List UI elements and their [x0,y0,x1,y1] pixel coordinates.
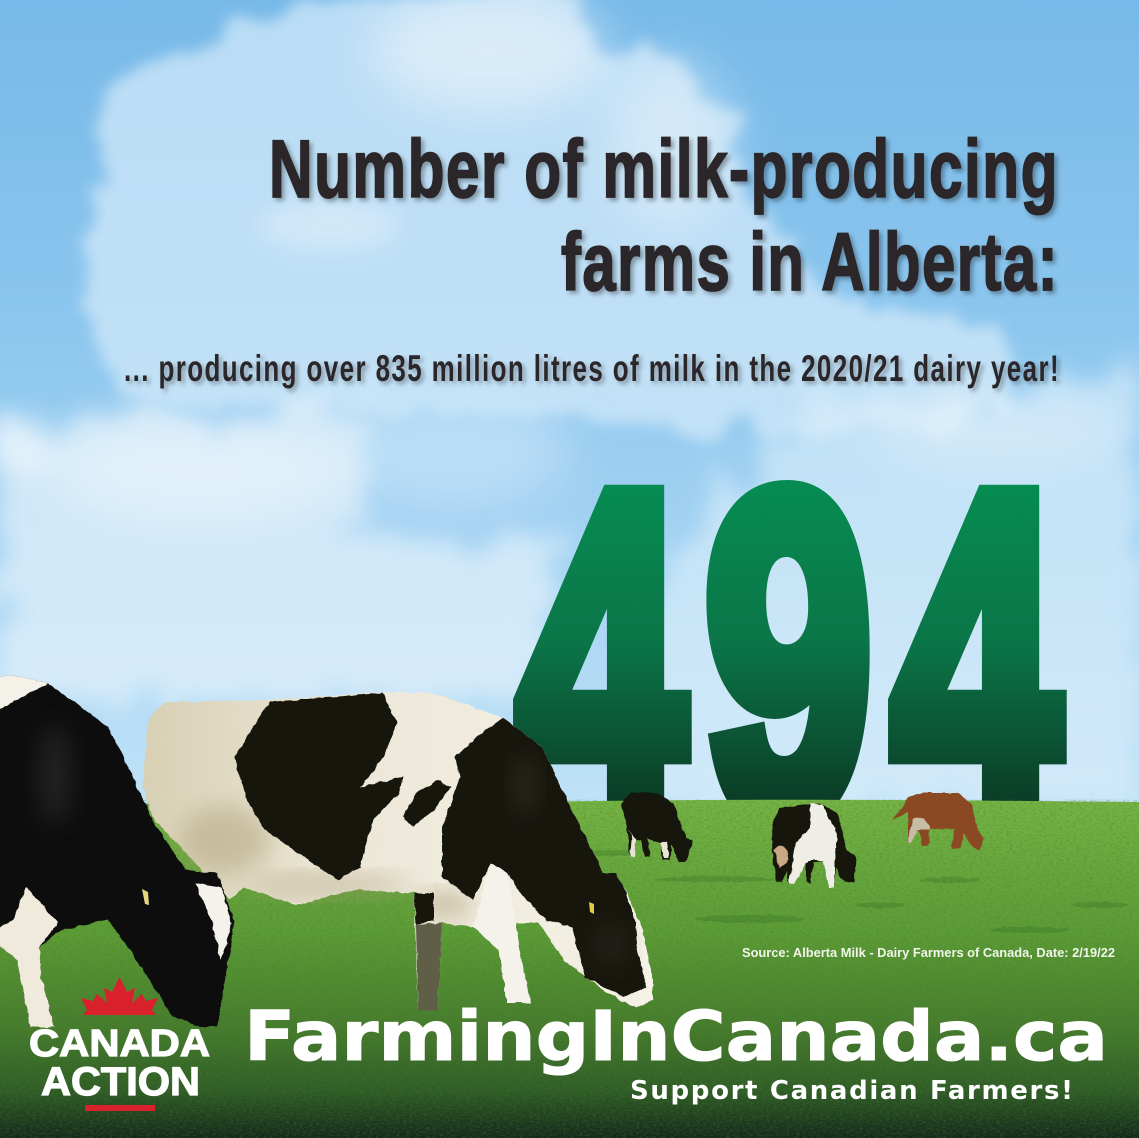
source line: Source: Alberta Milk - Dairy Farmers of Canada, Date: 2/19/22 [742,946,1115,960]
cow: small brown cow [892,793,984,850]
cow: foreground holstein [0,675,234,1027]
cow: small black cow [621,792,693,862]
logo: Canada Action: ACTION [41,1060,200,1104]
cow: small holstein [772,803,856,887]
grass field [0,800,1139,1138]
tagline: Support Canadian Farmers! [630,1076,1073,1106]
sky background [0,0,1139,810]
title [269,124,1059,308]
website heading: FarmingInCanada.ca [244,997,1108,1077]
clouds [0,0,1139,800]
big number 494: 494 [518,399,1061,913]
icon: maple leaf [81,977,158,1015]
cow: large grazing holstein [143,692,653,1010]
logo: Canada Action: CANADA [29,1023,210,1065]
logo: Canada Action [29,977,210,1111]
